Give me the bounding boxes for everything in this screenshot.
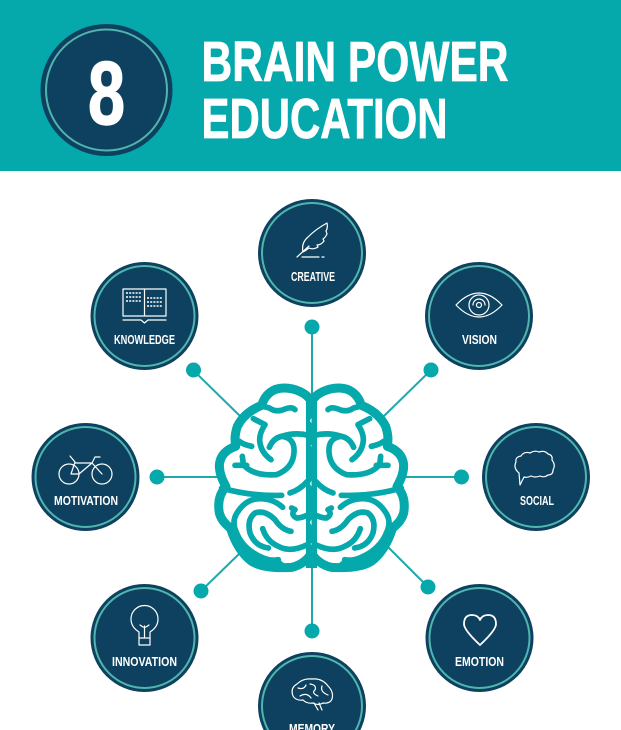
connector dots bbox=[150, 320, 469, 638]
node: motivation bbox=[32, 423, 140, 531]
label: INNOVATION bbox=[112, 655, 177, 669]
title: BRAIN POWER bbox=[202, 30, 508, 94]
icon: heart bbox=[464, 615, 496, 645]
number badge bbox=[40, 24, 172, 156]
icon: light bulb bbox=[131, 606, 158, 645]
node: memory bbox=[258, 652, 366, 730]
icon: bicycle bbox=[59, 456, 112, 484]
icon: small brain bbox=[292, 679, 332, 710]
node: creative bbox=[258, 199, 366, 307]
label: CREATIVE bbox=[291, 270, 335, 284]
brain: left hemisphere bbox=[219, 388, 313, 568]
central brain bbox=[219, 388, 404, 568]
label: EMOTION bbox=[455, 655, 504, 669]
icon: speech bubble bbox=[515, 451, 554, 485]
node: innovation bbox=[90, 584, 198, 692]
icon: feather bbox=[297, 223, 327, 257]
label: SOCIAL bbox=[520, 494, 554, 508]
node: emotion bbox=[426, 584, 534, 692]
connector lines bbox=[157, 327, 461, 631]
number badge: 8 bbox=[88, 44, 125, 144]
brain: right hemisphere bbox=[310, 388, 404, 568]
icon: eye bbox=[456, 293, 502, 317]
node: social bbox=[482, 423, 590, 531]
label: KNOWLEDGE bbox=[114, 333, 175, 347]
node: knowledge bbox=[90, 262, 198, 370]
title bbox=[202, 30, 508, 151]
label: VISION bbox=[462, 333, 497, 347]
node: vision bbox=[425, 262, 533, 370]
title: EDUCATION bbox=[202, 87, 448, 151]
label: MOTIVATION bbox=[54, 494, 118, 508]
icon: open book bbox=[123, 289, 166, 323]
header banner bbox=[0, 0, 621, 171]
